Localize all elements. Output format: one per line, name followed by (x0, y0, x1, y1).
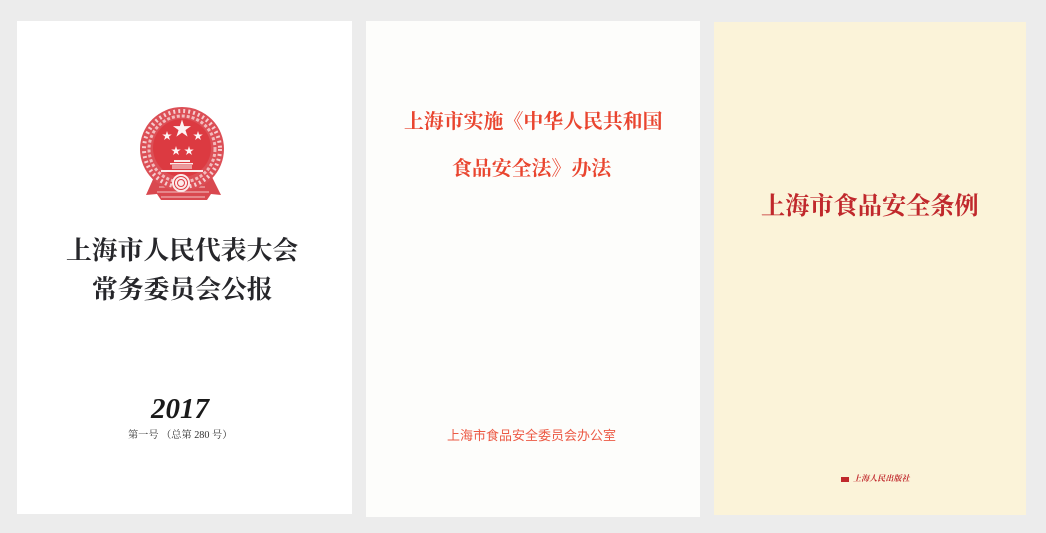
heading: measures title line one: 上海市实施《中华人民共和国 (404, 111, 663, 133)
panel: measures cover (366, 21, 700, 517)
heading: gazette title line one: 上海市人民代表大会 (66, 236, 298, 265)
publisher name: 上海人民出版社 (853, 474, 910, 483)
icon: publisher flag (841, 477, 849, 482)
heading: measures title line two: 食品安全法》办法 (452, 158, 611, 180)
panel: regulations cover (714, 22, 1026, 515)
publisher (841, 474, 910, 483)
panel: gazette cover (17, 21, 352, 514)
heading: regulations title: 上海市食品安全条例 (761, 193, 979, 220)
issuing office: 上海市食品安全委员会办公室 (447, 428, 616, 443)
year: 2017 (151, 393, 209, 425)
issue number: 第一号 （总第 280 号） (128, 430, 232, 441)
icon: national emblem (140, 107, 224, 200)
heading: gazette title line two: 常务委员会公报 (92, 275, 273, 304)
